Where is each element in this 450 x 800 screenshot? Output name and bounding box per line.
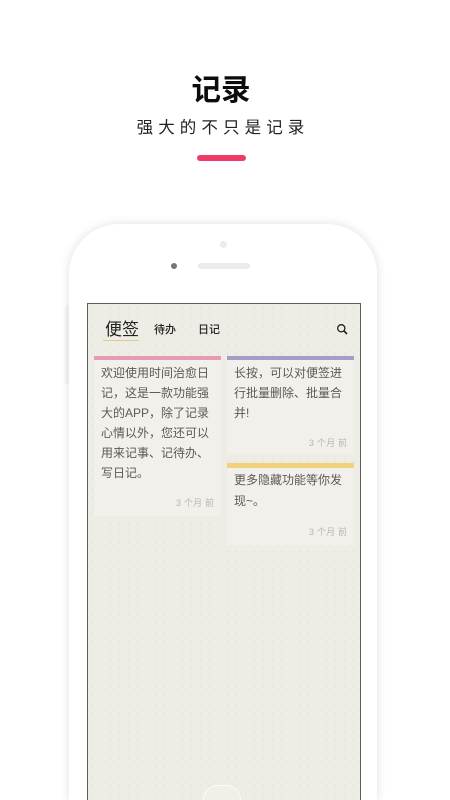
note text: 欢迎使用时间治愈日 bbox=[101, 366, 209, 380]
note bar: yellow bbox=[227, 463, 354, 468]
note bar: pink bbox=[94, 356, 221, 360]
note bar: purple bbox=[227, 356, 354, 360]
note: long press bbox=[227, 356, 354, 454]
app screen bbox=[87, 303, 361, 800]
note text bbox=[101, 366, 209, 480]
tab underline bbox=[103, 340, 139, 341]
note text: 现~。 bbox=[234, 494, 265, 508]
phone sensor bbox=[220, 241, 227, 248]
tab: 待办: 待办 bbox=[154, 324, 176, 336]
note text: 更多隐藏功能等你发 bbox=[234, 473, 342, 487]
accent bar bbox=[197, 155, 246, 161]
note text: 记，这是一款功能强 bbox=[101, 386, 209, 400]
note text: 大的APP，除了记录 bbox=[101, 406, 209, 420]
phone camera bbox=[171, 263, 177, 269]
phone side buttons bbox=[66, 306, 70, 384]
tab: 便签: 便签 bbox=[105, 320, 139, 339]
note text: 写日记。 bbox=[101, 466, 149, 480]
note: hidden features bbox=[227, 463, 354, 545]
note time: 3 个月 前 bbox=[309, 527, 347, 537]
note time: 3 个月 前 bbox=[176, 498, 214, 508]
note text bbox=[234, 473, 342, 508]
icon: search bbox=[337, 324, 348, 335]
phone speaker bbox=[198, 263, 250, 269]
phone body bbox=[69, 224, 377, 800]
note text: 长按，可以对便签进 bbox=[234, 366, 342, 380]
note time: 3 个月 前 bbox=[309, 438, 347, 448]
note text: 用来记事、记待办、 bbox=[101, 446, 209, 460]
note text: 并! bbox=[234, 406, 249, 420]
subtitle: 强大的不只是记录 bbox=[137, 119, 309, 137]
phone mockup bbox=[64, 221, 380, 800]
note text: 心情以外，您还可以 bbox=[101, 426, 209, 440]
home button bbox=[203, 785, 241, 800]
note text: 行批量删除、批量合 bbox=[234, 386, 342, 400]
note: welcome bbox=[94, 356, 221, 516]
note text bbox=[234, 366, 342, 420]
title: 记录 bbox=[191, 74, 250, 107]
tab: 日记: 日记 bbox=[198, 324, 220, 336]
